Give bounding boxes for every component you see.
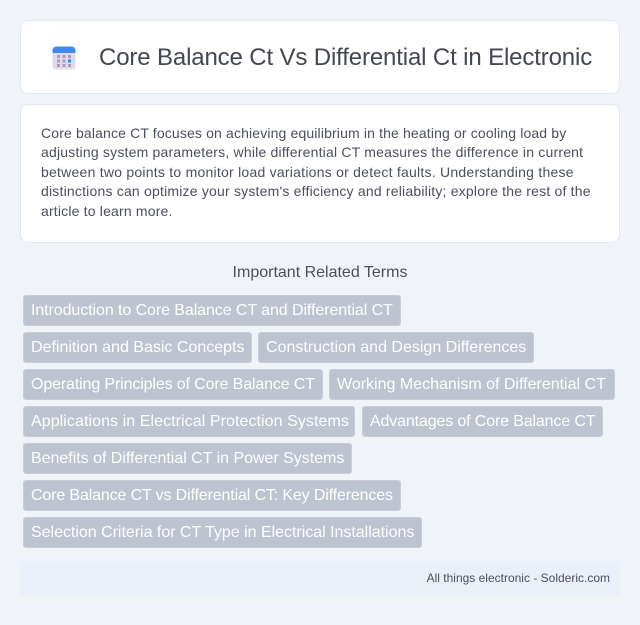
tag: Selection Criteria for CT Type in Electrical Installations [31,524,414,541]
intro text: between two points to monitor load variations or detect faults. Understanding these [41,164,574,180]
tag [23,480,401,511]
intro card [20,104,620,243]
tag [23,443,352,474]
tag: Advantages of Core Balance CT [370,413,595,430]
footer bar: All things electronic - Solderic.com [427,571,610,585]
intro text: article to learn more. [41,203,173,219]
tag [23,369,323,400]
tag: Working Mechanism of Differential CT [337,376,606,393]
footer bar [20,561,620,595]
tag [258,332,534,363]
intro text: distinctions can optimize your system's efficiency and reliability; explore the rest of the [41,183,591,199]
intro text: adjusting system parameters, while differential CT measures the difference in current [41,144,583,160]
intro text: Core balance CT focuses on achieving equilibrium in the heating or cooling load by [41,125,566,141]
tag [362,406,603,437]
tag: Introduction to Core Balance CT and Differential CT [31,302,393,319]
tag [23,295,401,326]
intro text [41,125,591,219]
header card [20,20,620,94]
tag: Operating Principles of Core Balance CT [31,376,315,393]
tag: Construction and Design Differences [266,339,526,356]
tag list [23,295,615,548]
tag [329,369,615,400]
tag: Benefits of Differential CT in Power Systems [31,450,344,467]
tag: Applications in Electrical Protection Systems [31,413,349,430]
tag [23,332,252,363]
title: Core Balance Ct Vs Differential Ct in Electronic [99,44,592,71]
tag: Definition and Basic Concepts [31,339,244,356]
tag: Core Balance CT vs Differential CT: Key Differences [31,487,393,504]
icon: calendar [52,46,76,70]
heading: related terms: Important Related Terms [233,264,407,281]
tag [23,406,355,437]
tag [23,517,422,548]
